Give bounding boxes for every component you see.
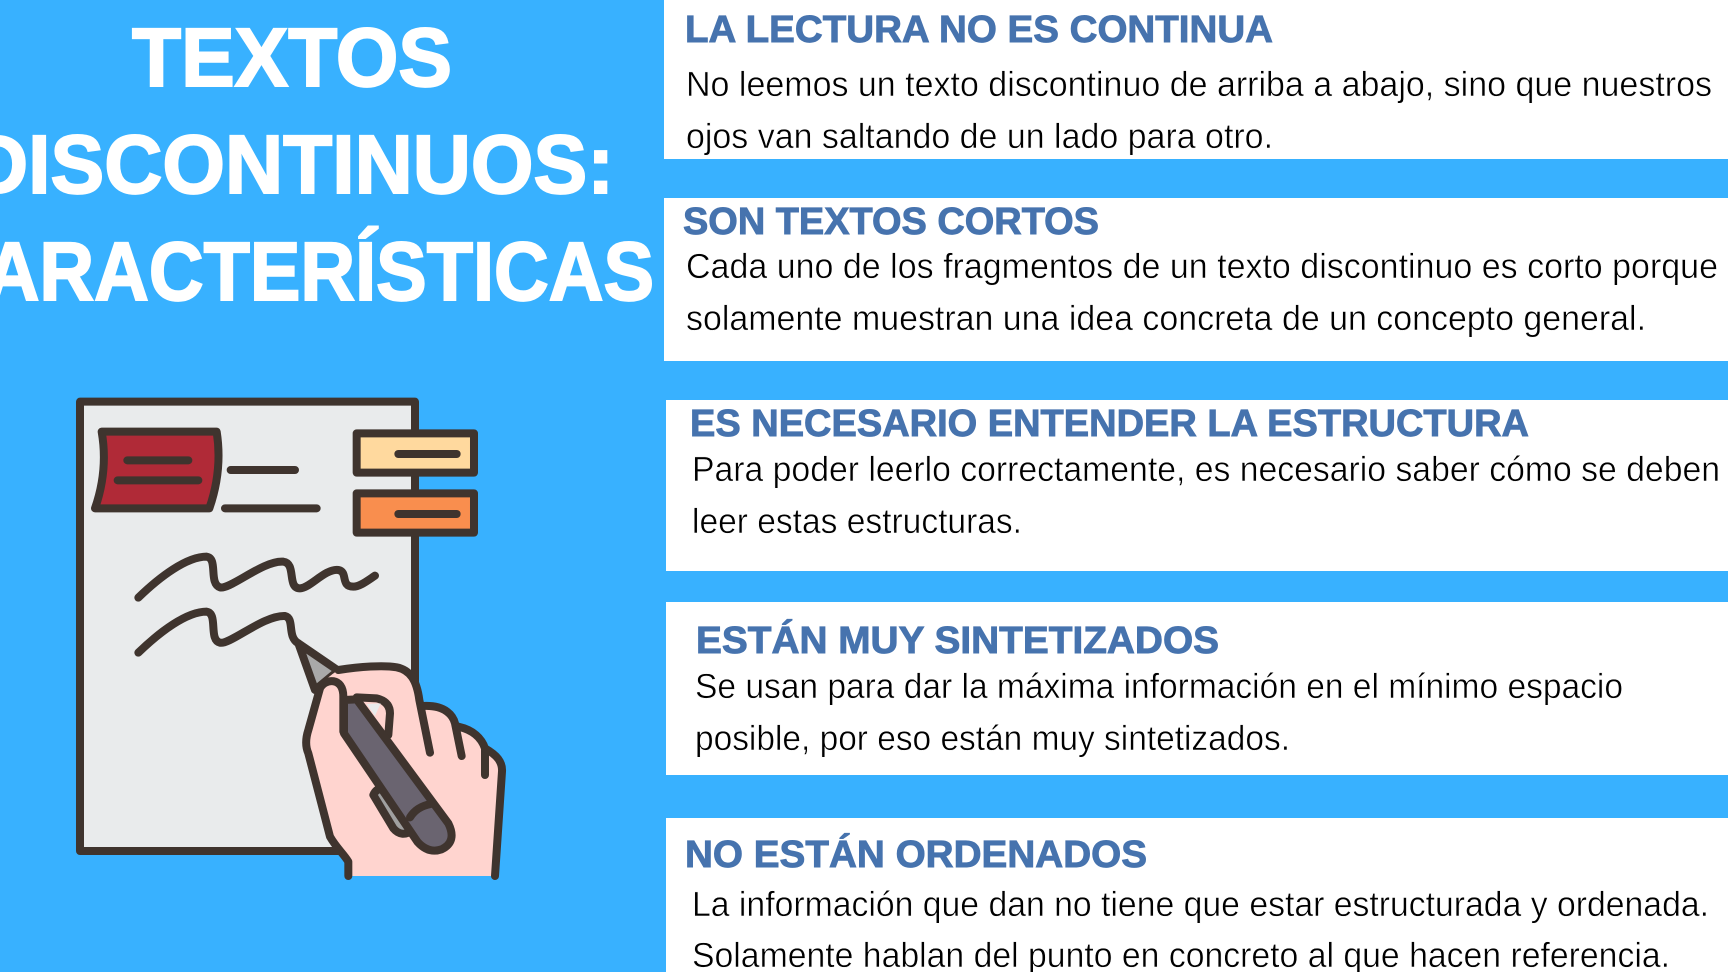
heading: LA LECTURA NO ES CONTINUA bbox=[685, 9, 1273, 51]
body text bbox=[692, 450, 1720, 541]
heading: NO ESTÁN ORDENADOS bbox=[685, 833, 1147, 876]
body text bbox=[686, 247, 1718, 338]
panel: no están ordenados bbox=[666, 818, 1728, 972]
body text bbox=[692, 885, 1709, 972]
body text: No leemos un texto discontinuo de arriba a abajo, sino que nuestros bbox=[686, 65, 1712, 104]
body text bbox=[686, 65, 1712, 156]
red note with lines bbox=[95, 432, 219, 508]
heading: ESTÁN MUY SINTETIZADOS bbox=[696, 619, 1219, 662]
title bbox=[0, 11, 654, 318]
body text: leer estas estructuras. bbox=[692, 502, 1022, 541]
body text bbox=[695, 667, 1623, 758]
panel: la lectura no es continua bbox=[664, 0, 1728, 159]
pencil tip bbox=[298, 643, 338, 690]
icon: hand writing on a document bbox=[80, 402, 502, 876]
body text: solamente muestran una idea concreta de un concepto general. bbox=[686, 299, 1646, 338]
body text: Se usan para dar la máxima información en el mínimo espacio bbox=[695, 667, 1623, 706]
document sheet bbox=[80, 402, 415, 851]
panel: es necesario entender la estructura bbox=[666, 400, 1728, 571]
title: TEXTOS bbox=[132, 11, 452, 104]
yellow tab bbox=[357, 433, 474, 473]
body text: Cada uno de los fragmentos de un texto discontinuo es corto porque bbox=[686, 247, 1718, 286]
handwriting scribble top bbox=[138, 557, 375, 598]
panel: son textos cortos bbox=[664, 198, 1728, 361]
body text: Para poder leerlo correctamente, es necesario saber cómo se deben bbox=[692, 450, 1720, 489]
orange tab bbox=[357, 493, 474, 533]
handwriting scribble bottom bbox=[138, 612, 298, 653]
pencil body bbox=[344, 699, 452, 851]
panel: están muy sintetizados bbox=[666, 602, 1728, 775]
body text: posible, por eso están muy sintetizados. bbox=[695, 719, 1290, 758]
header lines bbox=[225, 470, 317, 508]
pencil clip bbox=[373, 788, 413, 834]
heading: SON TEXTOS CORTOS bbox=[683, 201, 1099, 243]
body text: La información que dan no tiene que estar estructurada y ordenada. bbox=[692, 885, 1709, 924]
hand bbox=[306, 666, 502, 876]
heading: ES NECESARIO ENTENDER LA ESTRUCTURA bbox=[690, 403, 1529, 445]
body text: ojos van saltando de un lado para otro. bbox=[686, 117, 1273, 156]
